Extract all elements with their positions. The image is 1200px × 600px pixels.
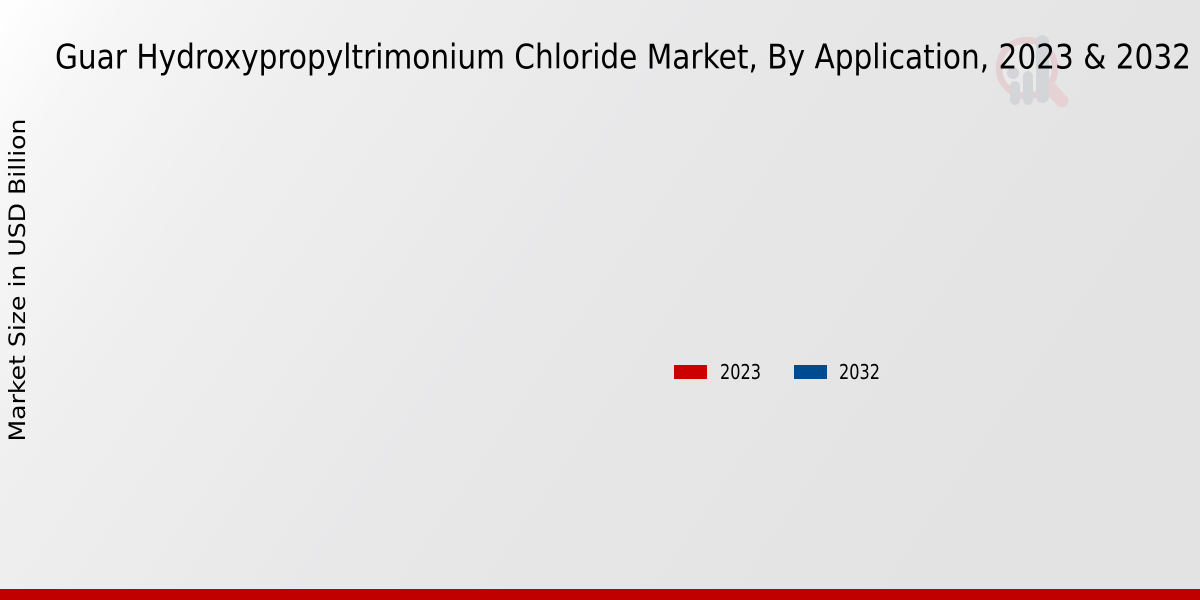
icon: magnifier watermark with bars xyxy=(999,35,1062,105)
y-axis label: Market Size in USD Billion xyxy=(5,118,31,442)
legend label: 2032: 2032 xyxy=(839,360,880,384)
footer bar xyxy=(0,589,1200,600)
legend swatch: 2032 xyxy=(794,365,827,379)
legend xyxy=(674,360,880,384)
legend swatch: 2023 xyxy=(674,365,707,379)
legend label: 2023: 2023 xyxy=(720,360,761,384)
